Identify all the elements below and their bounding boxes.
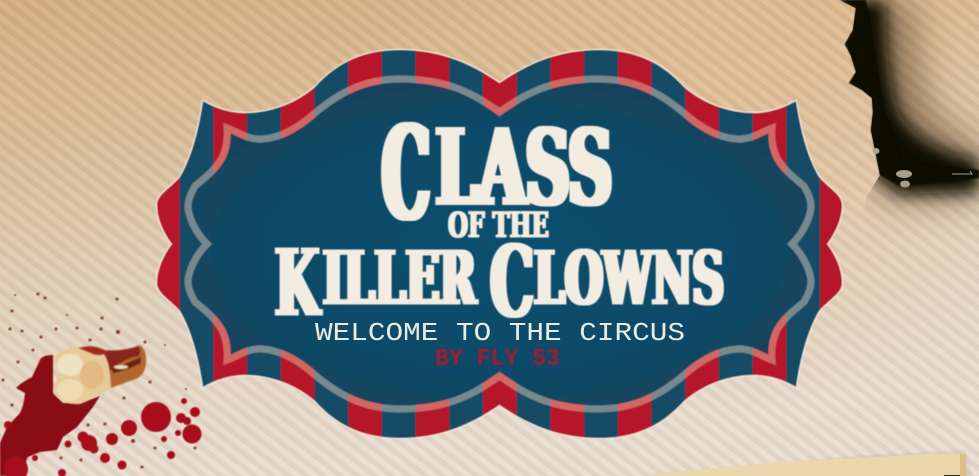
blood splatter xyxy=(0,292,202,476)
tooth xyxy=(54,345,146,404)
tooth crown xyxy=(54,346,111,404)
circus banner badge xyxy=(157,50,842,438)
title line: Killer: ILLER xyxy=(323,236,476,322)
title line: Class xyxy=(382,99,612,249)
title line: Class: C xyxy=(382,99,430,249)
blood specks xyxy=(2,292,196,468)
tooth roots xyxy=(98,345,146,389)
blood drops xyxy=(4,398,202,476)
banner edge highlight xyxy=(157,50,842,438)
title line: Class: LASS xyxy=(436,106,612,229)
title line: of the: OF THE xyxy=(448,205,549,246)
subtitle: WELCOME TO THE CIRCUS xyxy=(315,318,685,348)
scorched burn mark, top right xyxy=(840,0,979,200)
byline: BY FLY 53 xyxy=(435,346,560,373)
title xyxy=(275,99,724,340)
title line: Clowns: LOWNS xyxy=(534,236,724,322)
red and blue stripes xyxy=(157,50,842,438)
blood pool xyxy=(0,355,100,476)
title line: Clowns xyxy=(490,225,724,340)
title line: Killer: K xyxy=(275,229,321,337)
title line: Clowns: C xyxy=(490,225,534,340)
wooden plank, bottom right xyxy=(652,450,972,476)
inner panel with ring xyxy=(188,79,811,409)
title line: Killer xyxy=(275,229,476,337)
